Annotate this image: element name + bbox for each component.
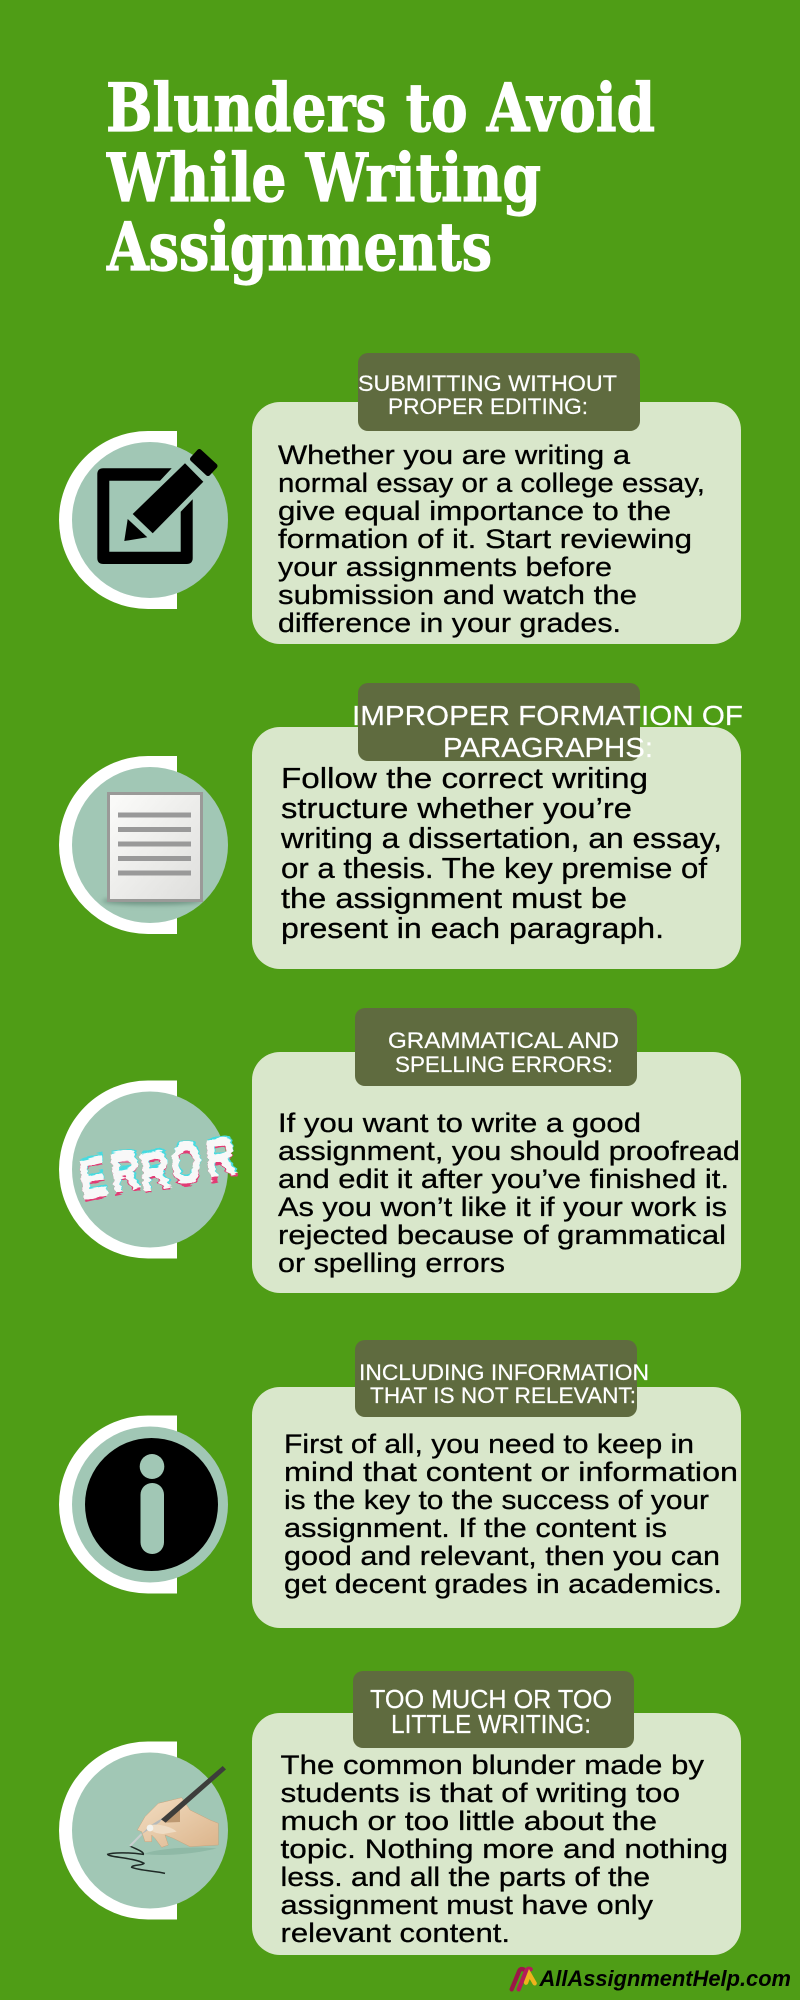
body text <box>284 1429 738 1599</box>
body card <box>252 1713 741 1955</box>
icon: logo slashes <box>512 1969 535 1989</box>
panel: including information that is not relevant <box>59 1340 741 1628</box>
body card <box>252 1387 741 1628</box>
body text: give equal importance to the <box>278 496 671 526</box>
heading text <box>370 1686 612 1739</box>
body text <box>278 440 705 638</box>
body text: relevant content. <box>280 1918 510 1948</box>
heading text: PARAGRAPHS: <box>443 732 653 763</box>
heading badge <box>353 1671 634 1748</box>
body text: normal essay or a college essay, <box>278 468 705 498</box>
heading text: INCLUDING INFORMATION <box>359 1360 649 1385</box>
icon: hand writing with pen in circle <box>59 1742 228 1920</box>
panel: submitting without proper editing <box>59 353 741 644</box>
icon: glitched error word in circle <box>59 1080 240 1258</box>
heading text: TOO MUCH OR TOO <box>370 1686 612 1714</box>
heading text: PROPER EDITING: <box>388 394 588 419</box>
heading text: SUBMITTING WITHOUT <box>358 371 617 396</box>
title: Assignments <box>106 208 492 286</box>
body text: assignment must have only <box>280 1890 654 1920</box>
body text: good and relevant, then you can <box>284 1541 720 1571</box>
heading badge <box>358 353 640 431</box>
heading text <box>352 700 743 763</box>
body text: structure whether you’re <box>281 793 632 825</box>
icon: document in circle <box>59 756 228 934</box>
heading badge <box>355 1340 637 1417</box>
heading text: GRAMMATICAL AND <box>388 1028 619 1053</box>
body text: formation of it. Start reviewing <box>278 524 692 554</box>
icon: information in circle <box>59 1416 228 1594</box>
body text <box>280 763 722 945</box>
body text: is the key to the success of your <box>284 1485 709 1515</box>
heading text: SPELLING ERRORS: <box>395 1052 613 1077</box>
body text: assignment. If the content is <box>284 1513 667 1543</box>
body text: get decent grades in academics. <box>284 1569 722 1599</box>
body text: First of all, you need to keep in <box>284 1429 694 1459</box>
logo text: AllAssignmentHelp.com <box>539 1966 791 1991</box>
body text: the assignment must be <box>281 883 627 915</box>
body text: mind that content or information <box>284 1457 738 1487</box>
body text: If you want to write a good <box>278 1108 641 1138</box>
heading badge <box>355 1008 637 1086</box>
body text <box>280 1750 728 1948</box>
body text: As you won’t like it if your work is <box>278 1192 727 1222</box>
icon: glitched error word in circle: ERROR <box>77 1122 240 1209</box>
body text: topic. Nothing more and nothing <box>280 1834 728 1864</box>
heading text <box>359 1360 649 1408</box>
body text: or spelling errors <box>278 1248 505 1278</box>
icon: glitched error word in circle: ERROR <box>76 1124 239 1212</box>
body card <box>252 727 741 969</box>
heading text: LITTLE WRITING: <box>391 1711 591 1739</box>
icon: edit pencil in circle <box>59 431 228 609</box>
body text: students is that of writing too <box>280 1778 680 1808</box>
footer logo <box>512 1966 791 1991</box>
body text: less. and all the parts of the <box>280 1862 650 1892</box>
heading text: IMPROPER FORMATION OF <box>352 700 743 731</box>
body card <box>252 1052 741 1293</box>
body text: your assignments before <box>278 552 612 582</box>
body text <box>278 1108 740 1278</box>
body text: The common blunder made by <box>280 1750 705 1780</box>
body text: difference in your grades. <box>278 608 621 638</box>
heading text: THAT IS NOT RELEVANT: <box>370 1383 636 1408</box>
body text: submission and watch the <box>278 580 637 610</box>
panel: too much or too little writing <box>59 1671 741 1955</box>
heading text <box>388 1028 619 1077</box>
body text: present in each paragraph. <box>281 913 664 945</box>
title: While Writing <box>106 139 541 217</box>
body text: rejected because of grammatical <box>278 1220 726 1250</box>
body text: assignment, you should proofread <box>278 1136 740 1166</box>
body text: writing a dissertation, an essay, <box>280 823 722 855</box>
panel: improper formation of paragraphs <box>59 683 743 969</box>
title <box>106 69 655 286</box>
panel: grammatical and spelling errors <box>59 1008 741 1293</box>
heading badge <box>358 683 640 761</box>
title: Blunders to Avoid <box>106 69 655 147</box>
body card <box>252 402 741 644</box>
icon: glitched error word in circle: ERROR <box>76 1127 239 1214</box>
body text: Follow the correct writing <box>281 763 648 795</box>
body text: and edit it after you’ve finished it. <box>278 1164 729 1194</box>
body text: or a thesis. The key premise of <box>281 853 708 885</box>
heading text <box>358 371 617 419</box>
body text: much or too little about the <box>280 1806 657 1836</box>
body text: Whether you are writing a <box>278 440 631 470</box>
